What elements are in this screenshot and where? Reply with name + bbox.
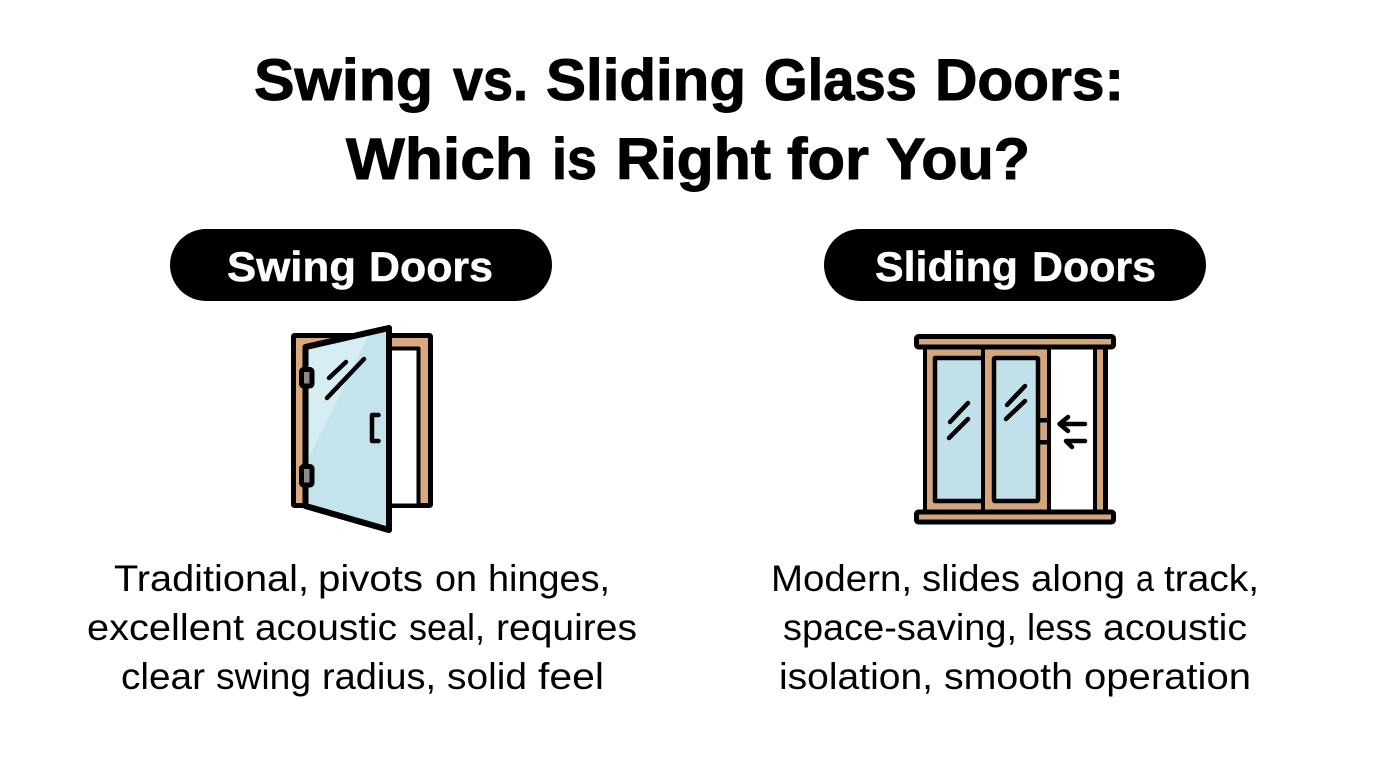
heading pill: sliding doors: Doors	[1032, 243, 1156, 290]
title: Sliding	[546, 48, 746, 113]
title: You?	[886, 127, 1030, 192]
text block: swing description: swing	[216, 656, 311, 697]
text block: sliding description: along	[1031, 558, 1125, 599]
text block: sliding description: smooth	[944, 656, 1073, 697]
text block: swing description: acoustic	[255, 607, 397, 648]
text block: swing description: excellent	[87, 607, 245, 648]
text block: swing description: seal,	[409, 607, 485, 648]
panel: sliding doors	[771, 229, 1259, 697]
text block: swing description: requires	[496, 607, 637, 648]
text block: sliding description: a	[1136, 558, 1154, 599]
title: is	[552, 127, 597, 192]
text block: sliding description: space-saving,	[783, 607, 1017, 648]
title	[254, 48, 1124, 192]
text block: sliding description: operation	[1084, 656, 1251, 697]
text block: swing description: radius,	[322, 656, 436, 697]
text block: sliding description	[771, 558, 1259, 697]
panel: swing doors	[87, 229, 637, 697]
heading pill: sliding doors	[824, 229, 1206, 301]
text block: swing description: clear	[121, 656, 205, 697]
title: for	[787, 127, 869, 192]
text block: sliding description: isolation,	[779, 656, 933, 697]
text block: sliding description: Modern,	[771, 558, 912, 599]
text block: swing description: hinges,	[488, 558, 610, 599]
heading pill: swing doors: Doors	[369, 243, 493, 290]
text block: swing description: solid	[447, 656, 527, 697]
title: Glass	[764, 48, 917, 113]
text block: swing description: Traditional,	[114, 558, 309, 599]
text block: sliding description: track,	[1164, 558, 1259, 599]
icon: swing glass door	[294, 328, 430, 530]
title: Right	[616, 127, 771, 192]
title: Which	[346, 127, 533, 192]
text block: swing description: on	[435, 558, 477, 599]
title: Doors:	[935, 48, 1124, 113]
heading pill: sliding doors: Sliding	[875, 243, 1018, 290]
text block: swing description	[87, 558, 637, 697]
text block: sliding description: less	[1027, 607, 1092, 648]
icon: sliding glass door	[916, 336, 1114, 522]
heading pill: swing doors: Swing	[227, 243, 356, 290]
text block: swing description: feel	[538, 656, 604, 697]
text block: swing description: pivots	[318, 558, 423, 599]
heading pill: swing doors	[170, 229, 552, 301]
text block: sliding description: acoustic	[1103, 607, 1247, 648]
title: vs.	[453, 48, 528, 113]
title: Swing	[254, 48, 433, 113]
text block: sliding description: slides	[922, 558, 1020, 599]
